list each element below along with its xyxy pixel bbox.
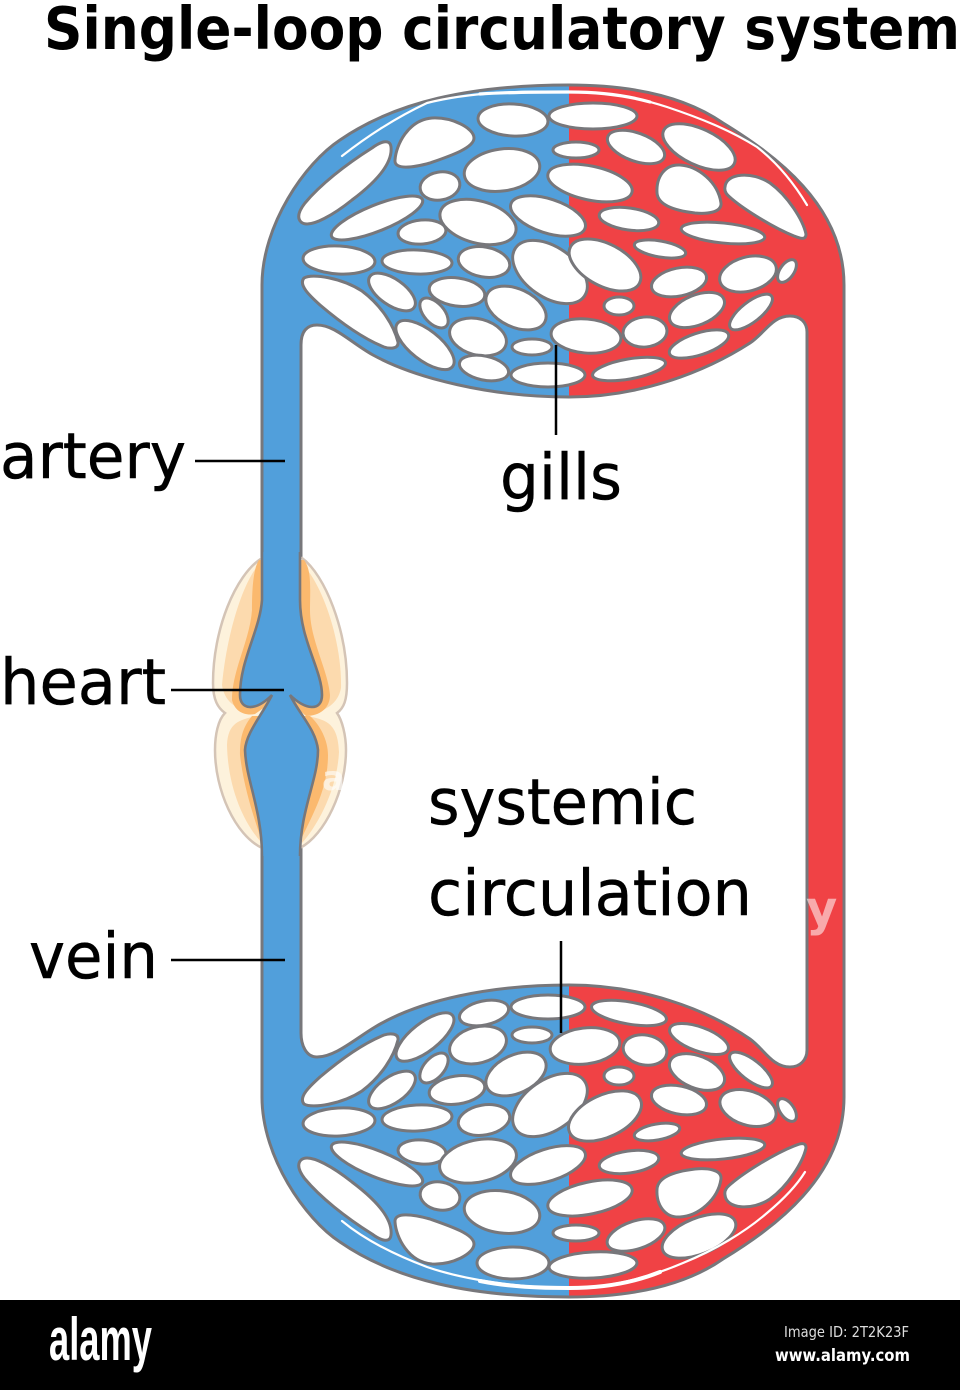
vessel outline: [262, 85, 844, 1297]
circulatory loop diagram: [262, 85, 844, 1297]
heart chamber outline: [240, 552, 322, 856]
heart outer shell: [213, 558, 347, 848]
top highlight: [342, 92, 807, 205]
label: systemic circulation: circulation: [428, 857, 752, 930]
systemic capillary bed: [299, 995, 806, 1280]
label: systemic circulation: [428, 766, 752, 1033]
gill capillary bed: [299, 102, 806, 387]
footer logo: alamy: [49, 1306, 152, 1373]
heart muscle: upper right: [300, 566, 341, 713]
watermark fragments: a: [322, 759, 345, 799]
label: vein: vein: [29, 920, 158, 993]
label: systemic circulation: systemic: [428, 766, 697, 839]
label: artery: artery: [0, 420, 186, 493]
watermark fragments: y: [806, 881, 837, 937]
watermark fragments: [322, 759, 837, 937]
heart muscle: lower left: [227, 716, 262, 843]
vessel: red oxygenated half: [569, 86, 842, 1296]
website: www.alamy.com: [775, 1346, 910, 1366]
image id: Image ID: 2T2K23F: [784, 1323, 909, 1341]
heart chambers: [240, 552, 322, 856]
footer bar: [0, 1300, 960, 1390]
label: gills: gills: [500, 441, 622, 514]
heart muscle: orange inner band: [232, 560, 330, 842]
heart muscle: upper left: [222, 568, 262, 712]
heart: [213, 552, 347, 856]
vessel: blue deoxygenated half: [264, 86, 569, 1296]
label: heart: heart: [0, 646, 166, 719]
heart muscle: lower right: [302, 716, 339, 843]
bottom highlight: [342, 1172, 805, 1288]
